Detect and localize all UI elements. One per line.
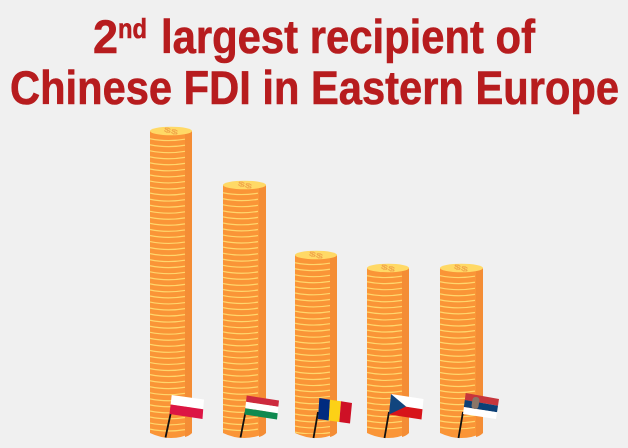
flag: Czech Republic [384, 394, 424, 438]
flag: Hungary [240, 396, 279, 438]
flag: Romania [314, 398, 352, 438]
coin stack: Hungary [223, 180, 266, 438]
coin stack: Poland [150, 126, 192, 438]
coin stack: Hungary: $$ [237, 180, 253, 191]
coin stack: Czech Republic: $$ [380, 263, 396, 274]
coin stack: Poland: $$ [163, 126, 179, 137]
flag: Serbia [458, 393, 499, 438]
coin stack: Serbia [440, 263, 483, 438]
title: nd [118, 13, 147, 44]
coin stack: Serbia: $$ [453, 263, 469, 274]
title: largest recipient of [161, 10, 535, 63]
flag: Poland [166, 395, 204, 438]
title [10, 10, 619, 114]
coin stack: Romania: $$ [308, 250, 324, 261]
title: 2 [93, 10, 118, 63]
coin stack: Romania [295, 250, 337, 440]
coin stack: Czech Republic [367, 263, 409, 438]
